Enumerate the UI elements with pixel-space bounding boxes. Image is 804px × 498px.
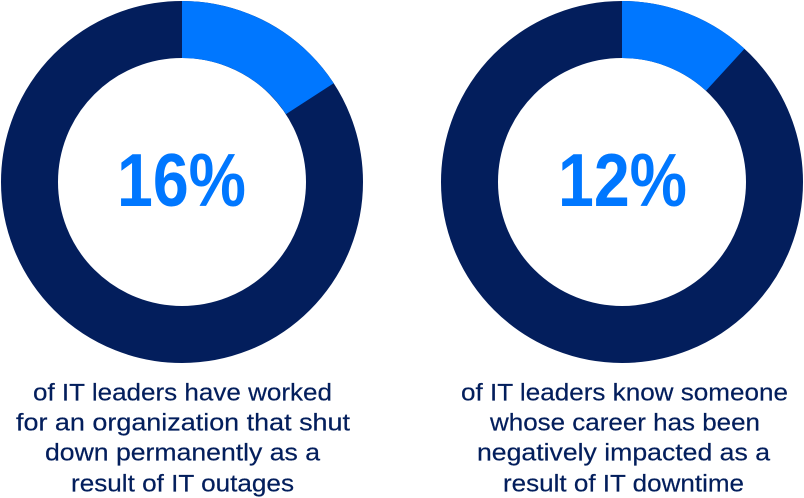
caption: 12%: result of IT downtime bbox=[503, 471, 744, 498]
panel: 12% statistic bbox=[461, 1, 788, 498]
caption: 16%: of IT leaders have worked bbox=[33, 380, 332, 407]
caption: 12%: of IT leaders know someone bbox=[461, 380, 788, 407]
panel: 16% statistic bbox=[16, 1, 350, 498]
donut chart: 16% bbox=[30, 1, 334, 334]
caption: 12%: negatively impacted as a bbox=[477, 440, 771, 467]
caption: 12% bbox=[461, 380, 788, 498]
caption: 16%: down permanently as a bbox=[45, 440, 321, 467]
donut chart: 12% bbox=[470, 1, 774, 334]
caption: 16%: result of IT outages bbox=[71, 471, 294, 498]
value: 12%: 12% bbox=[558, 138, 687, 222]
caption: 16%: for an organization that shut bbox=[16, 410, 350, 437]
caption: 16% bbox=[16, 380, 350, 498]
caption: 12%: whose career has been bbox=[489, 410, 760, 437]
value: 16%: 16% bbox=[117, 138, 246, 222]
